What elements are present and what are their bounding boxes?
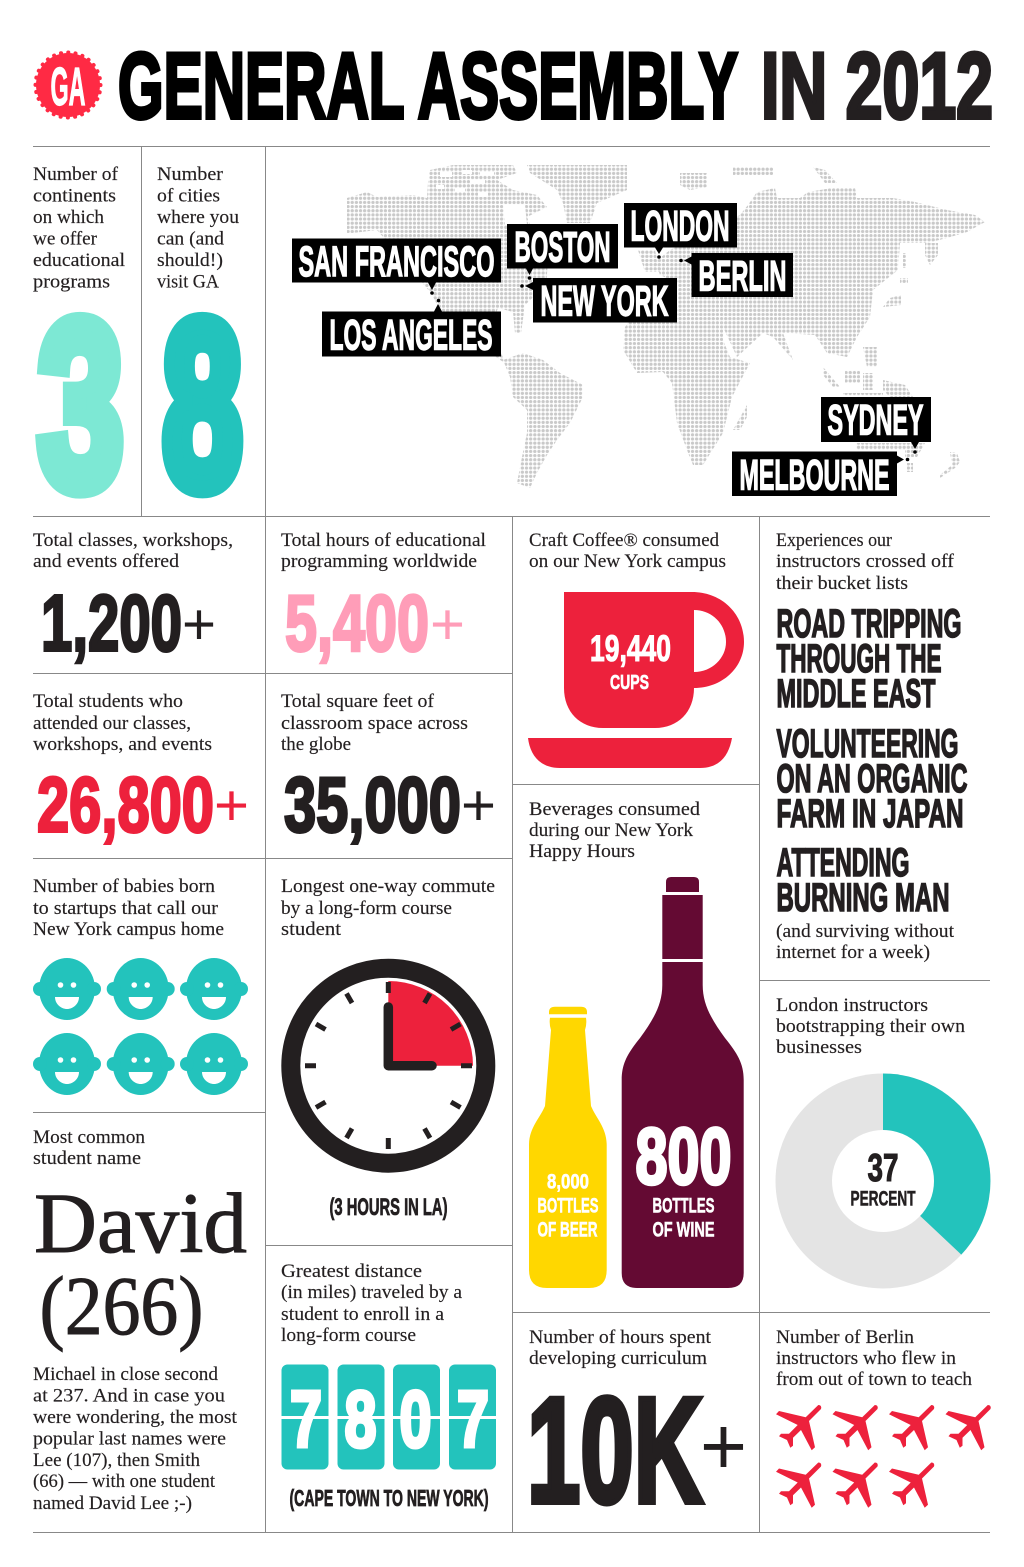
label: beverages: during our New York bbox=[529, 821, 694, 841]
flip counter: 7807: 0 bbox=[400, 1374, 432, 1464]
icon: wine bottle: 800 bbox=[636, 1112, 732, 1200]
panel: continents bbox=[33, 165, 125, 538]
label: continents: programs bbox=[33, 272, 110, 292]
count: 266: (266) bbox=[40, 1260, 204, 1353]
panel: beverages bbox=[529, 800, 744, 1288]
body text: runner up names: Lee (107), then Smith bbox=[33, 1451, 200, 1471]
label: cities: visit GA bbox=[157, 272, 220, 292]
label: greatest distance: student to enroll in a bbox=[281, 1305, 444, 1325]
label: babies: Number of babies born bbox=[33, 877, 215, 897]
label: cities: can (and bbox=[157, 230, 225, 250]
label: curriculum hours: developing curriculum bbox=[529, 1349, 708, 1369]
label: greatest distance: (in miles) traveled by a bbox=[281, 1283, 462, 1303]
flip counter: 7807: 7 bbox=[290, 1374, 322, 1464]
stat: 26,800+: + bbox=[214, 773, 249, 838]
flip counter: 7807 bbox=[281, 1364, 496, 1470]
icon: coffee cup: CUPS bbox=[610, 671, 649, 694]
stat: 10K+: 10K bbox=[527, 1366, 703, 1534]
stat: 35,000+: + bbox=[461, 773, 496, 838]
note: surviving without internet: internet for a week) bbox=[776, 943, 930, 963]
panel: craft coffee bbox=[528, 531, 744, 768]
label: London instructors: London instructors bbox=[776, 996, 928, 1016]
label: most common name: student name bbox=[33, 1149, 141, 1169]
stat: 1,200+: + bbox=[182, 592, 216, 657]
label: most common name bbox=[33, 1128, 145, 1169]
map label: Los Angeles bbox=[322, 299, 501, 360]
map label: San Francisco bbox=[292, 238, 501, 295]
label: total students: Total students who bbox=[33, 692, 183, 712]
icon: beer bottle: BOTTLES bbox=[538, 1194, 598, 1218]
heading: road tripping bbox=[776, 602, 962, 716]
label: cities bbox=[157, 165, 239, 292]
body text: runner up names: Michael in close second bbox=[33, 1365, 219, 1385]
icon: six baby faces bbox=[33, 958, 248, 1095]
icon: beer bottle bbox=[529, 1007, 607, 1288]
map label: San Francisco: SAN FRANCISCO bbox=[298, 239, 494, 286]
label: Berlin instructors: Number of Berlin bbox=[776, 1328, 914, 1348]
body text: runner up names bbox=[33, 1365, 238, 1514]
donut chart: 37 percent bbox=[776, 1074, 990, 1288]
label: square feet: Total square feet of bbox=[281, 692, 435, 712]
label: cities: where you bbox=[157, 208, 239, 228]
label: total classes: Total classes, workshops, bbox=[33, 531, 233, 551]
label: beverages: Beverages consumed bbox=[529, 800, 701, 820]
label: square feet: the globe bbox=[281, 735, 351, 755]
label: craft coffee bbox=[529, 531, 726, 572]
map label: Berlin: BERLIN bbox=[698, 254, 786, 300]
big name: David: David bbox=[34, 1175, 247, 1271]
panel: total hours bbox=[281, 531, 486, 668]
map label: London: LONDON bbox=[630, 204, 730, 250]
label: London instructors: businesses bbox=[776, 1038, 862, 1058]
icon: beer bottle: 8,000 bbox=[547, 1170, 589, 1194]
big number: 3: 3 bbox=[38, 273, 123, 538]
label: Berlin instructors: from out of town to teach bbox=[776, 1370, 972, 1390]
panel: London instructors bbox=[776, 996, 990, 1288]
label: curriculum hours bbox=[529, 1328, 712, 1369]
logo: GA cog badge: GA bbox=[50, 57, 86, 117]
icon: clock bbox=[291, 968, 486, 1163]
stat: 5,400+: 5,400 bbox=[285, 578, 429, 668]
label: square feet: classroom space across bbox=[281, 714, 468, 734]
label: greatest distance bbox=[281, 1262, 462, 1346]
panel: babies bbox=[33, 877, 248, 1095]
label: cities: should!) bbox=[157, 251, 223, 271]
body text: runner up names: popular last names were bbox=[33, 1430, 226, 1450]
label: longest commute bbox=[281, 877, 495, 940]
label: Berlin instructors bbox=[776, 1328, 972, 1390]
label: total hours: programming worldwide bbox=[281, 552, 477, 572]
panel: total students bbox=[33, 692, 249, 848]
note: surviving without internet: (and surviving without bbox=[776, 922, 955, 942]
panel: longest commute bbox=[281, 877, 495, 1221]
map label: New York bbox=[520, 278, 677, 326]
panel: greatest distance bbox=[281, 1262, 496, 1511]
map label: New York: NEW YORK bbox=[540, 278, 669, 326]
panel: bucket list experiences bbox=[776, 531, 968, 963]
icon: wine bottle: OF WINE bbox=[652, 1218, 714, 1242]
heading: volunteering bbox=[776, 722, 968, 836]
heading: burning man bbox=[776, 841, 950, 920]
label: bucket list: instructors crossed off bbox=[776, 552, 955, 572]
label: craft coffee: on our New York campus bbox=[529, 552, 726, 572]
label: square feet bbox=[281, 692, 468, 755]
label: beverages: Happy Hours bbox=[529, 842, 635, 862]
label: continents: continents bbox=[33, 186, 116, 206]
map label: Los Angeles: LOS ANGELES bbox=[330, 312, 492, 360]
body text: runner up names: were wondering, the most bbox=[33, 1408, 238, 1428]
caption: Cape Town to New York: (CAPE TOWN TO NEW YORK) bbox=[290, 1485, 488, 1511]
label: most common name: Most common bbox=[33, 1128, 145, 1148]
label: babies: to startups that call our bbox=[33, 899, 218, 919]
label: total hours bbox=[281, 531, 486, 572]
heading: burning man: ATTENDING bbox=[776, 841, 910, 885]
map label: Berlin bbox=[679, 253, 793, 300]
stat: 10K+: + bbox=[700, 1401, 747, 1492]
panel: Berlin instructors bbox=[776, 1328, 991, 1508]
panel: curriculum hours bbox=[527, 1328, 747, 1534]
icon: wine bottle bbox=[622, 877, 744, 1288]
label: longest commute: by a long-form course bbox=[281, 899, 452, 919]
label: longest commute: student bbox=[281, 920, 342, 940]
stat: 35,000+: 35,000 bbox=[284, 760, 461, 848]
label: greatest distance: long-form course bbox=[281, 1326, 416, 1346]
note: surviving without internet bbox=[776, 922, 955, 963]
map label: Sydney bbox=[821, 397, 931, 454]
label: London instructors bbox=[776, 996, 965, 1058]
label: total students bbox=[33, 692, 212, 755]
label: continents: educational bbox=[33, 251, 125, 271]
map label: London bbox=[624, 203, 737, 259]
label: curriculum hours: Number of hours spent bbox=[529, 1328, 712, 1348]
flip counter: 7807: 7 bbox=[457, 1374, 489, 1464]
body text: runner up names: named David Lee ;-) bbox=[33, 1494, 192, 1514]
label: London instructors: bootstrapping their own bbox=[776, 1017, 965, 1037]
body text: runner up names: (66) — with one student bbox=[33, 1472, 216, 1492]
donut chart: 37 percent: PERCENT bbox=[850, 1186, 916, 1210]
label: Berlin instructors: instructors who flew in bbox=[776, 1349, 956, 1369]
label: continents: Number of bbox=[33, 165, 119, 185]
logo: GA cog badge bbox=[36, 52, 100, 118]
caption: 3 hours in LA: (3 HOURS IN LA) bbox=[330, 1194, 448, 1221]
dotted world map bbox=[347, 165, 985, 488]
label: continents bbox=[33, 165, 125, 292]
label: babies: New York campus home bbox=[33, 920, 224, 940]
label: bucket list: their bucket lists bbox=[776, 574, 908, 594]
map label: Melbourne bbox=[732, 452, 909, 500]
label: total hours: Total hours of educational bbox=[281, 531, 486, 551]
icon: wine bottle: BOTTLES bbox=[652, 1194, 714, 1218]
map label: Sydney: SYDNEY bbox=[828, 398, 924, 444]
stat: 1,200+: 1,200 bbox=[41, 578, 182, 668]
icon: beer bottle: OF BEER bbox=[538, 1218, 598, 1242]
label: total classes bbox=[33, 531, 233, 572]
label: cities: Number bbox=[157, 165, 223, 185]
map label: Melbourne: MELBOURNE bbox=[740, 452, 890, 500]
label: beverages bbox=[529, 800, 701, 862]
label: total students: workshops, and events bbox=[33, 735, 212, 755]
flip counter: 7807: 8 bbox=[344, 1374, 376, 1464]
panel: total classes bbox=[33, 531, 233, 668]
label: total classes: and events offered bbox=[33, 552, 180, 572]
label: continents: we offer bbox=[33, 230, 97, 250]
stat: 5,400+: + bbox=[430, 592, 465, 657]
panel: most common name bbox=[33, 1128, 247, 1514]
label: total students: attended our classes, bbox=[33, 714, 191, 734]
label: craft coffee: Craft Coffee® consumed bbox=[529, 531, 720, 551]
label: bucket list bbox=[776, 531, 955, 594]
label: greatest distance: Greatest distance bbox=[281, 1262, 422, 1282]
map label: Boston: BOSTON bbox=[514, 224, 610, 272]
body text: runner up names: at 237. And in case you bbox=[33, 1386, 225, 1406]
icon: seven airplanes bbox=[776, 1405, 991, 1508]
panel: cities bbox=[157, 165, 242, 538]
label: longest commute: Longest one-way commute bbox=[281, 877, 495, 897]
label: bucket list: Experiences our bbox=[776, 531, 892, 551]
label: continents: on which bbox=[33, 208, 104, 228]
stat: 26,800+: 26,800 bbox=[37, 760, 214, 848]
icon: coffee cup bbox=[528, 592, 744, 768]
icon: coffee cup: 19,440 bbox=[590, 628, 671, 669]
label: babies bbox=[33, 877, 224, 940]
map label: Boston bbox=[507, 224, 618, 280]
big number: 8: 8 bbox=[162, 273, 242, 538]
donut chart: 37 percent: 37 bbox=[868, 1147, 898, 1190]
panel: square feet bbox=[281, 692, 496, 848]
label: cities: of cities bbox=[157, 186, 220, 206]
